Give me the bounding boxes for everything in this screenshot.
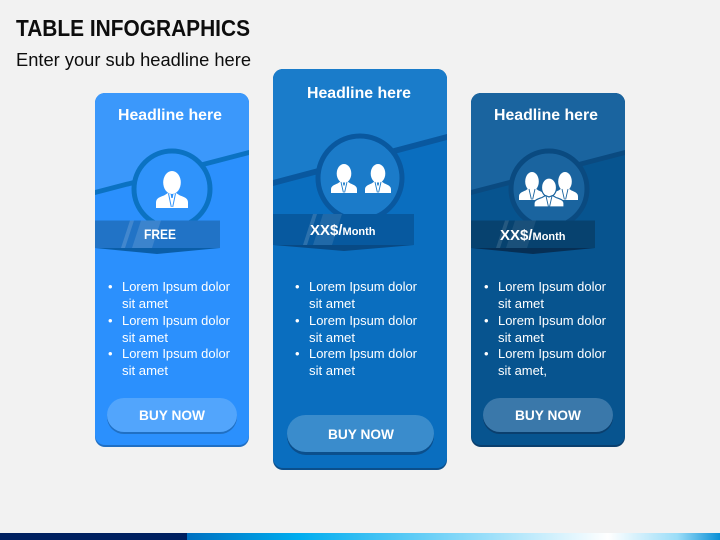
- price label: free: FREE: [144, 226, 176, 242]
- card 1 base: [95, 93, 249, 447]
- card 1 ribbon: [95, 220, 220, 254]
- card 3 feature list: sit amet: [498, 296, 544, 311]
- card 3 button: [483, 398, 613, 434]
- card 1 button: [107, 398, 237, 434]
- card 3 feature list: Lorem Ipsum dolor: [498, 346, 607, 361]
- card 2 icon circle: [318, 136, 402, 220]
- price label: month: XX$/Month: [310, 222, 376, 239]
- panel: free plan: [95, 93, 249, 447]
- card 3 face: [471, 93, 625, 445]
- card 2 feature list: •: [295, 279, 300, 294]
- card 2 button: [287, 415, 434, 455]
- card 3 feature list: sit amet: [498, 330, 544, 345]
- card 2 feature list: sit amet: [309, 363, 355, 378]
- card 3 feature list: Lorem Ipsum dolor: [498, 279, 607, 294]
- person back right: [552, 172, 578, 200]
- card 2 headline: Headline here: [307, 85, 411, 102]
- card 3 button: BUY NOW: [515, 407, 582, 423]
- card 2 feature list: [295, 279, 418, 378]
- card 3 base: [471, 93, 625, 447]
- card 1 feature list: •: [108, 346, 113, 361]
- card 2 feature list: •: [295, 313, 300, 328]
- icon: two people: [331, 164, 391, 193]
- card 1 icon circle: [134, 151, 210, 227]
- card 1 feature list: •: [108, 279, 113, 294]
- card 1 face: [95, 93, 249, 445]
- card 1 headline: Headline here: [118, 107, 222, 124]
- person right: [365, 164, 391, 193]
- card 3 feature list: [484, 279, 607, 378]
- card 2 feature list: Lorem Ipsum dolor: [309, 279, 418, 294]
- card 1 feature list: Lorem Ipsum dolor: [122, 313, 231, 328]
- card 2 feature list: sit amet: [309, 296, 355, 311]
- card 2 button: BUY NOW: [328, 426, 395, 442]
- card 2 feature list: Lorem Ipsum dolor: [309, 346, 418, 361]
- card 1 button: BUY NOW: [139, 407, 206, 423]
- card 2 feature list: •: [295, 346, 300, 361]
- card 3 feature list: •: [484, 313, 489, 328]
- icon: team of three: [519, 172, 578, 207]
- card 3 feature list: Lorem Ipsum dolor: [498, 313, 607, 328]
- panel: team plan: [471, 93, 625, 447]
- price label: month: XX$/Month: [500, 227, 566, 244]
- card 3 feature list: •: [484, 346, 489, 361]
- person back left: [519, 172, 545, 200]
- card 1 feature list: Lorem Ipsum dolor: [122, 346, 231, 361]
- card 3 feature list: •: [484, 279, 489, 294]
- icon: person: [156, 171, 188, 208]
- card 2 feature list: Lorem Ipsum dolor: [309, 313, 418, 328]
- card 2 ribbon: [273, 214, 414, 251]
- card 1 feature list: sit amet: [122, 363, 168, 378]
- card 1 feature list: Lorem Ipsum dolor: [122, 279, 231, 294]
- card 1 feature list: •: [108, 313, 113, 328]
- card 3 icon circle: [511, 151, 587, 227]
- card 2 base: [273, 69, 447, 470]
- card 1 feature list: [108, 279, 231, 378]
- sub headline: Enter your sub headline here: [16, 50, 251, 70]
- card 2 feature list: sit amet: [309, 330, 355, 345]
- title: TABLE INFOGRAPHICS: [16, 15, 250, 41]
- card 3 feature list: sit amet,: [498, 363, 547, 378]
- card 3 headline: Headline here: [494, 107, 598, 124]
- card 3 ribbon: [471, 220, 595, 254]
- card 1 feature list: sit amet: [122, 330, 168, 345]
- person left: [331, 164, 357, 193]
- card 1 feature list: sit amet: [122, 296, 168, 311]
- panel: two-person plan: [273, 69, 447, 470]
- card 2 face: [273, 69, 447, 468]
- footer colour bar: [0, 533, 720, 540]
- person front: [534, 178, 564, 207]
